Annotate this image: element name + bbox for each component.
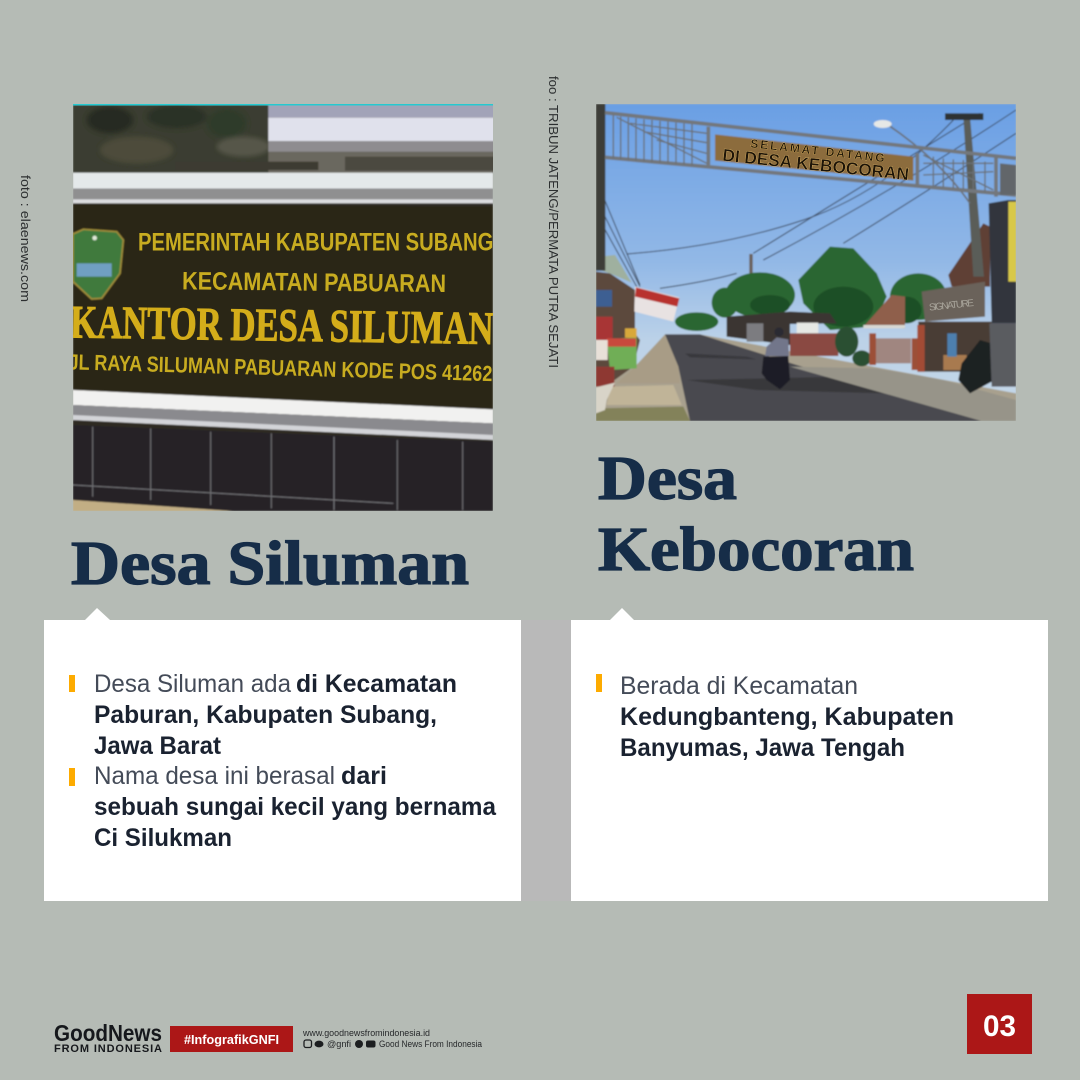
- icon: youtube: [366, 1040, 376, 1048]
- gap strip between panels: [521, 620, 571, 901]
- heading: Desa Kebocoran: [598, 445, 914, 584]
- road: [665, 334, 982, 421]
- sign text: JL RAYA SILUMAN PABUARAN KODE POS 41262: [68, 349, 493, 386]
- panel: Desa Siluman: [44, 608, 521, 901]
- buildings right: [948, 223, 990, 287]
- logo: GoodNews From Indonesia: [54, 1020, 162, 1055]
- houses middle: [727, 312, 837, 345]
- text: lokasi: [620, 672, 954, 762]
- trees: [675, 247, 947, 331]
- ground: [596, 334, 1016, 421]
- bullet: [596, 674, 602, 692]
- panel: Desa Kebocoran: [571, 608, 1048, 901]
- utility pole far: [749, 254, 753, 274]
- photo: gerbang Desa Kebocoran: [596, 104, 1016, 421]
- bullet 1: [69, 675, 75, 692]
- heading: Desa Kebocoran: Desa: [598, 445, 737, 513]
- sign text: [68, 229, 494, 386]
- social links: [302, 1028, 482, 1049]
- text: lokasi: Desa Siluman ada: [94, 670, 291, 698]
- icon: instagram: [304, 1040, 312, 1048]
- gantry sign text: SELAMAT DATANG: [750, 136, 885, 165]
- text: lokasi: Kedungbanteng, Kabupaten: [620, 703, 954, 731]
- text: asal nama: Nama desa ini berasal: [94, 762, 335, 790]
- text: asal nama: Ci Silukman: [94, 824, 232, 852]
- text: asal nama: sebuah sungai kecil yang bernama: [94, 793, 497, 821]
- heading: Desa Siluman: Desa Siluman: [71, 530, 469, 598]
- left shops: [596, 272, 640, 387]
- social links: Good News From Indonesia: [379, 1039, 482, 1049]
- hashtag badge: [170, 1026, 293, 1052]
- photo top edge line: [73, 104, 493, 106]
- text: asal nama: dari: [341, 762, 387, 790]
- social links: www.goodnewsfromindonesia.id: [302, 1028, 430, 1038]
- text: lokasi: Jawa Barat: [94, 732, 222, 760]
- photo credit right: foo : TRIBUN JATENG/PERMATA PUTRA SEJATI: [546, 76, 561, 368]
- wires: [603, 110, 1016, 288]
- street lamp: [887, 124, 970, 203]
- shop sign text: SIGNATURE: [928, 298, 975, 314]
- pillar: [989, 200, 1016, 323]
- text: lokasi: Paburan, Kabupaten Subang,: [94, 701, 437, 729]
- page number: [967, 994, 1032, 1054]
- motorbike right: [958, 340, 992, 393]
- logo: GoodNews From Indonesia: FROM INDONESIA: [54, 1043, 162, 1055]
- text: asal nama: [94, 762, 497, 852]
- heading: Desa Kebocoran: Kebocoran: [598, 516, 914, 584]
- social links: @gnfi: [327, 1039, 351, 1049]
- gantry sign text: DI DESA KEBOCORAN: [722, 145, 910, 184]
- gantry: [605, 113, 1016, 197]
- utility pole: [963, 117, 984, 277]
- sign text: KANTOR DESA SILUMAN: [70, 296, 494, 355]
- photo: Kantor Desa Siluman sign: [68, 105, 495, 511]
- hashtag badge: #InfografikGNFI: [184, 1032, 279, 1047]
- text: lokasi: Banyumas, Jawa Tengah: [620, 734, 905, 762]
- rider: [762, 356, 790, 389]
- sign text: PEMERINTAH KABUPATEN SUBANG: [138, 229, 493, 257]
- icon: twitter: [314, 1041, 324, 1047]
- page number: 03: [983, 1010, 1016, 1043]
- sign text: KECAMATAN PABUARAN: [182, 267, 446, 298]
- bullet 2: [69, 768, 75, 786]
- text: lokasi: Berada di Kecamatan: [620, 672, 858, 700]
- photo credit left: foto : elaenews.com: [18, 175, 33, 302]
- text: lokasi: di Kecamatan: [296, 670, 457, 698]
- logo: GoodNews From Indonesia: GoodNews: [54, 1020, 162, 1046]
- text: lokasi: [94, 670, 457, 760]
- icon: facebook: [355, 1040, 363, 1048]
- icon: Subang crest: [73, 229, 123, 299]
